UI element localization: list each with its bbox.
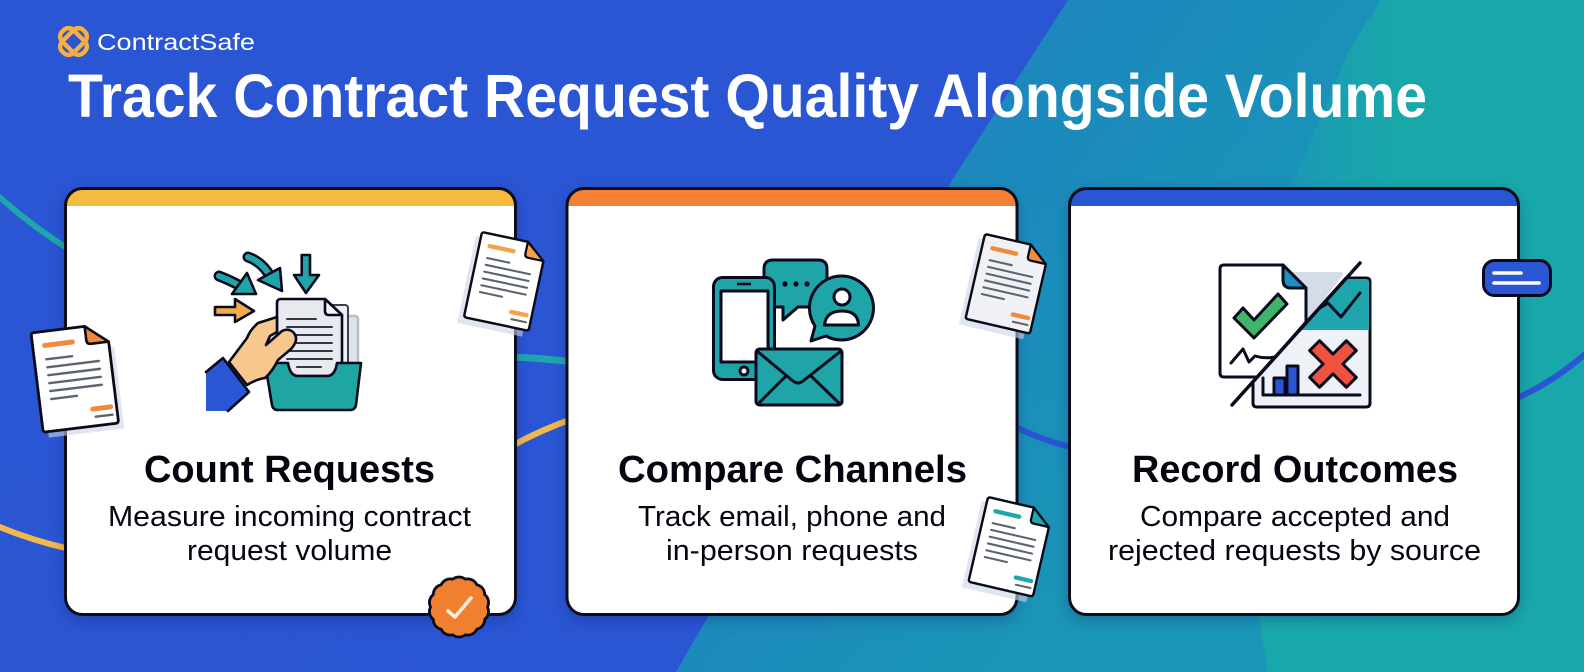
connector lines xyxy=(0,193,1584,549)
panel: record outcomes xyxy=(1070,188,1518,614)
icon: back sheets xyxy=(320,305,358,366)
heading: Record Outcomes xyxy=(1132,449,1458,491)
icon: diagonal divider xyxy=(1232,263,1360,405)
logo wordmark: ContractSafe xyxy=(97,29,255,55)
card frame xyxy=(1070,188,1518,614)
card frame xyxy=(567,188,1017,614)
title: Track Contract Request Quality Alongside Volume xyxy=(68,62,1427,130)
floating document: top right of card two xyxy=(959,233,1049,340)
icon: person bubble xyxy=(809,276,873,341)
description xyxy=(638,501,946,567)
icon: sleeve xyxy=(206,358,249,411)
description xyxy=(1108,501,1481,567)
heading: Compare Channels xyxy=(618,449,967,491)
description: Compare accepted and xyxy=(1140,501,1450,533)
description xyxy=(108,501,471,567)
floating document: top right of card one xyxy=(457,231,547,338)
icon: rejected chart xyxy=(1253,278,1370,407)
icon: tray xyxy=(265,363,361,410)
icon: front document xyxy=(277,299,342,376)
description: in-person requests xyxy=(666,535,918,567)
badge: orange check seal xyxy=(429,577,489,637)
panel: count requests xyxy=(66,188,516,614)
description: Measure incoming contract xyxy=(108,501,471,533)
floating document: lower right of card two xyxy=(962,496,1052,603)
description: rejected requests by source xyxy=(1108,535,1481,567)
description: request volume xyxy=(187,535,392,567)
tag: blue label chip xyxy=(1484,260,1550,296)
icon: hand filing documents into tray xyxy=(206,255,361,411)
heading: Count Requests xyxy=(144,449,435,491)
icon: communication channels xyxy=(714,260,873,405)
icon: hand xyxy=(229,317,296,385)
icon: accepted document xyxy=(1220,265,1306,377)
icon: chat bubble xyxy=(764,260,827,320)
icon: envelope xyxy=(756,349,842,405)
logo mark xyxy=(57,25,90,58)
description: Track email, phone and xyxy=(638,501,946,533)
icon: accepted versus rejected xyxy=(1220,263,1370,407)
icon: incoming arrows xyxy=(215,255,319,322)
icon: grey sheet xyxy=(1290,272,1343,321)
floating document: left of card one xyxy=(31,323,124,438)
card frame xyxy=(66,188,516,614)
logo xyxy=(57,25,255,58)
panel: compare channels xyxy=(567,188,1017,614)
icon: phone xyxy=(714,278,774,380)
